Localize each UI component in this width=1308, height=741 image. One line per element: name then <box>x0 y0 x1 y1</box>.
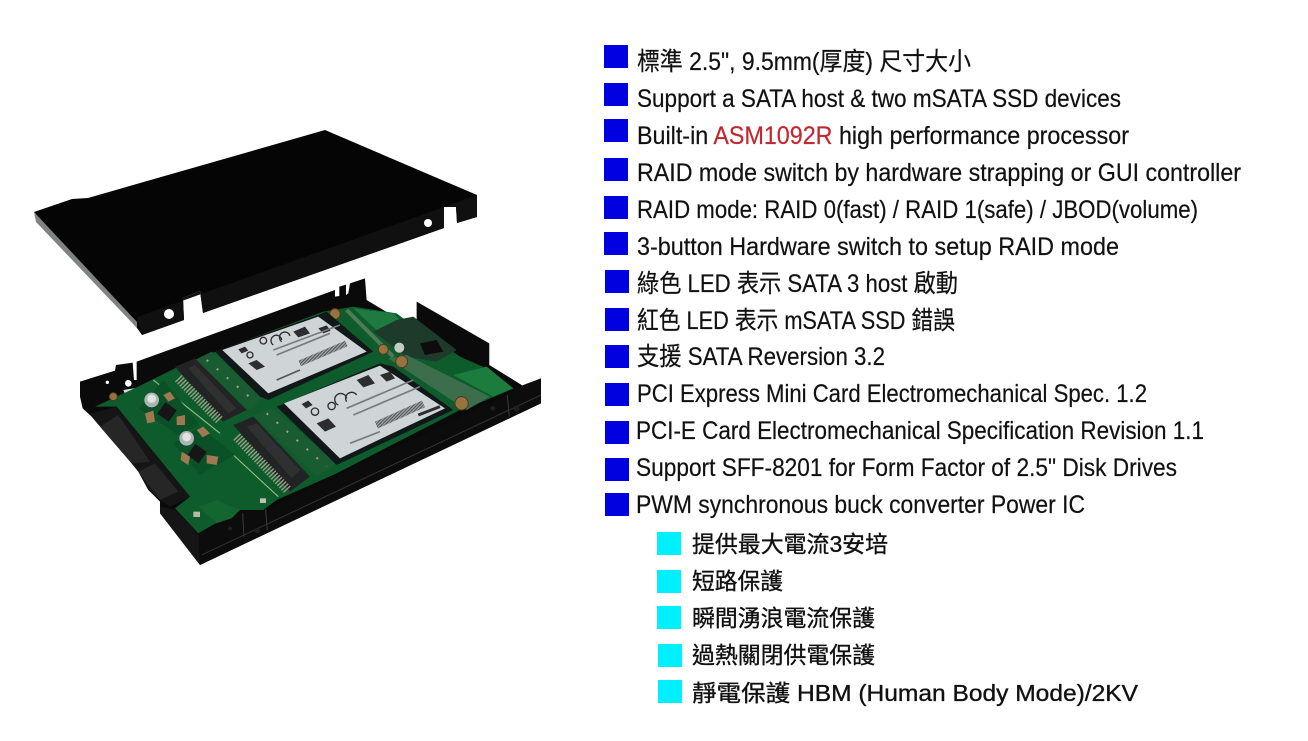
left front corner of tray <box>160 507 200 565</box>
sub bullet 5: 靜電保護 HBM (Human Body Mode)/2KV <box>692 680 1139 706</box>
bullet 6: 3-button Hardware switch to setup RAID mode <box>637 233 1119 261</box>
front wall of tray <box>198 378 541 565</box>
upper module board strip <box>195 352 263 410</box>
bullet 4: RAID mode switch by hardware strapping or GUI controller <box>637 159 1241 187</box>
sub bullet 3: 瞬間湧浪電流保護 <box>692 605 875 631</box>
bullet 7: 綠色 LED 表示 SATA 3 host 啟動 <box>637 270 958 298</box>
lower module board strip <box>253 408 337 477</box>
bullet 8: 紅色 LED 表示 mSATA SSD 錯誤 <box>637 307 955 335</box>
bullet 2: Support a SATA host & two mSATA SSD devices <box>637 85 1121 113</box>
feature list: main blue bullets <box>604 45 1241 519</box>
power IC protection list: cyan bullets <box>657 531 1139 706</box>
circuit board <box>95 307 513 533</box>
bullet 12: Support SFF-8201 for Form Factor of 2.5" Disk Drives <box>636 454 1177 482</box>
LEDs on board <box>193 498 266 517</box>
bullet 13: PWM synchronous buck converter Power IC <box>636 491 1085 519</box>
upper mSATA socket <box>175 358 247 422</box>
bullet 1: 標準 2.5", 9.5mm(厚度) 尺寸大小 <box>637 48 971 76</box>
upper mSATA SSD with label <box>215 312 373 400</box>
SATA connector <box>92 407 190 507</box>
tray: lower enclosure with circuit board <box>80 278 541 565</box>
lid: black metal top cover <box>34 130 477 335</box>
gold screws and mounting points <box>109 309 468 410</box>
bullet 11: PCI-E Card Electromechanical Specification Revision 1.1 <box>636 417 1204 445</box>
bullet 9: 支援 SATA Reversion 3.2 <box>637 343 885 371</box>
power circuit components <box>138 380 235 475</box>
sub bullet 2: 短路保護 <box>692 568 783 594</box>
illustration: exploded view of SSD enclosure <box>34 130 541 565</box>
tray black base and rear wall with tabs <box>80 278 541 565</box>
bullet 5: RAID mode: RAID 0(fast) / RAID 1(safe) / JBOD(volume) <box>637 196 1198 224</box>
bullet 3: Built-in ASM1092R high performance processor <box>637 122 1129 150</box>
sub bullet 4: 過熱關閉供電保護 <box>692 642 875 668</box>
lower mSATA socket <box>233 417 310 492</box>
bullet 10: PCI Express Mini Card Electromechanical Spec. 1.2 <box>637 380 1147 408</box>
sub bullet 1: 提供最大電流3安培 <box>692 531 888 557</box>
lower mSATA SSD with label <box>277 363 453 465</box>
